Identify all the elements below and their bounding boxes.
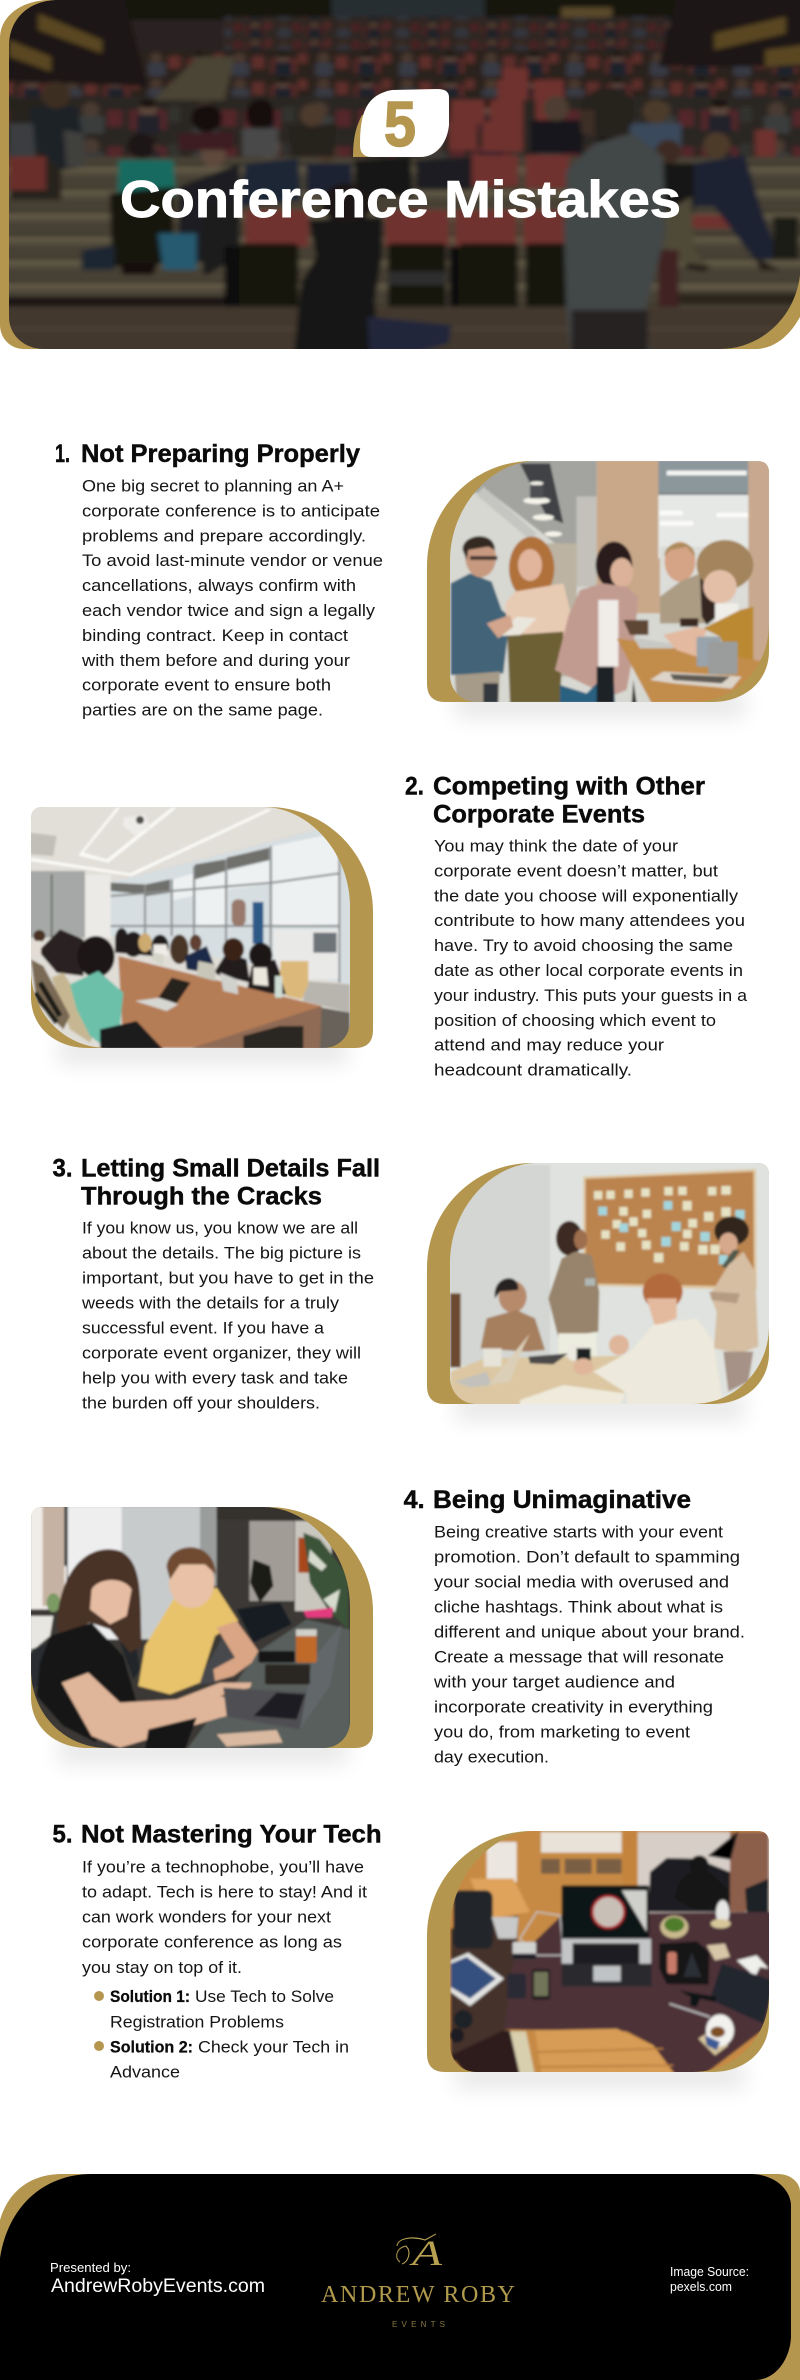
body text: mistake 1: cancellations, always confirm with — [82, 576, 356, 595]
title: Conference Mistakes — [120, 171, 681, 229]
body text: mistake 1: corporate conference is to anticipate — [82, 501, 380, 520]
body text: mistake 2: attend and may reduce your — [434, 1036, 664, 1055]
panel: mistake 3 text — [52, 1154, 380, 1412]
logo: Andrew Roby Events: A — [409, 2233, 443, 2273]
body text: mistake 1: To avoid last-minute vendor or venue — [82, 551, 383, 570]
heading: mistake 1: Not Preparing Properly — [81, 440, 360, 468]
solution 1 bullet: Use Tech to Solve — [195, 1987, 334, 2006]
image source credit: Image Source: — [670, 2264, 749, 2279]
body text: mistake 4: cliche hashtags. Think about what is — [434, 1598, 723, 1616]
presenter credit: Presented by: — [50, 2260, 131, 2275]
photo 4: two women at laptop — [31, 1507, 373, 1748]
solution 2 bullet: Solution 2: — [110, 2037, 193, 2056]
heading: mistake 3: Through the Cracks — [81, 1183, 322, 1211]
body text: mistake 1: with them before and during your — [81, 651, 350, 670]
panel: mistake 5 text — [52, 1820, 382, 2082]
body text: mistake 4: Create a message that will resonate — [434, 1648, 724, 1666]
shadow under photo 4 — [58, 1736, 348, 1764]
body text: mistake 4: Being creative starts with your event — [434, 1522, 723, 1542]
body text: mistake 1: parties are on the same page. — [82, 701, 323, 720]
body text: mistake 2: corporate event doesn’t matter, but — [434, 861, 718, 880]
body text: mistake 2: You may think the date of your — [434, 836, 678, 856]
body text: mistake 3: successful event. If you have a — [82, 1318, 325, 1338]
hero gold backing — [0, 0, 800, 349]
body text: mistake 4: you do, from marketing to event — [434, 1722, 690, 1742]
solution 2 bullet: Check your Tech in — [198, 2037, 349, 2056]
body text: mistake 2: headcount dramatically. — [434, 1061, 632, 1080]
body text: mistake 5: you stay on top of it. — [82, 1958, 242, 1977]
image source credit: pexels.com — [670, 2279, 732, 2294]
body text: mistake 4: incorporate creativity in everything — [434, 1698, 713, 1716]
body text: mistake 2: date as other local corporate events in — [434, 961, 743, 980]
body text: mistake 1 — [81, 476, 383, 720]
body text: mistake 3: the burden off your shoulders. — [82, 1394, 320, 1412]
body text: mistake 5: If you’re a technophobe, you’ll have — [82, 1858, 364, 1876]
heading: mistake 5: 5. — [52, 1820, 72, 1848]
body text: mistake 1: binding contract. Keep in contact — [82, 626, 348, 645]
heading: mistake 2: 2. — [405, 773, 424, 801]
body text: mistake 5 — [82, 1858, 367, 1977]
body text: mistake 5: to adapt. Tech is here to stay! And it — [82, 1883, 367, 1902]
body text: mistake 4: different and unique about your brand. — [434, 1622, 745, 1642]
shadow under photo 2 — [58, 1036, 348, 1064]
logo: Andrew Roby Events: ANDREW ROBY — [321, 2282, 515, 2308]
shadow under photo 3 — [455, 1393, 745, 1421]
heading: mistake 5: Not Mastering Your Tech — [81, 1820, 382, 1848]
badge: number 5 — [353, 88, 449, 160]
body text: mistake 5: corporate conference as long as — [82, 1932, 342, 1952]
heading: mistake 4: 4. — [404, 1486, 425, 1514]
photo 3: team at corkboard — [427, 1163, 769, 1404]
panel: mistake 4 text — [404, 1486, 745, 1766]
aisle stairs — [153, 57, 235, 100]
body text: mistake 4: day execution. — [434, 1748, 549, 1766]
solution 1 bullet — [94, 1987, 334, 2032]
solution 2 bullet — [94, 2037, 349, 2082]
body text: mistake 2: your industry. This puts your guests in a — [434, 986, 748, 1005]
body text: mistake 2: position of choosing which event to — [434, 1011, 716, 1030]
body text: mistake 2 — [434, 836, 748, 1080]
body text: mistake 4: promotion. Don’t default to spamming — [434, 1548, 740, 1566]
shadow under photo 1 — [455, 690, 745, 718]
body text: mistake 3 — [81, 1218, 374, 1412]
heading: mistake 3 — [52, 1154, 380, 1211]
photo 1: team around table — [427, 461, 769, 702]
photo 5: desk with laptop — [427, 1831, 769, 2072]
shadow under photo 5 — [455, 2061, 745, 2089]
body text: mistake 3: important, but you have to get in the — [82, 1268, 374, 1288]
body text: mistake 3: help you with every task and take — [82, 1368, 348, 1388]
footer gold backing — [0, 2174, 800, 2380]
mid row people — [9, 82, 798, 277]
hero photo: conference audience — [0, 0, 800, 360]
speaker — [564, 133, 666, 360]
heading: mistake 1: 1. — [55, 440, 70, 468]
heading: mistake 2 — [405, 773, 705, 829]
footer panel — [0, 2174, 800, 2380]
image source credit — [670, 2264, 749, 2294]
panel: mistake 1 text — [55, 440, 383, 720]
body text: mistake 3: about the details. The big picture is — [82, 1244, 361, 1262]
heading: mistake 3: Letting Small Details Fall — [81, 1154, 380, 1182]
footer black panel — [0, 2174, 791, 2380]
body text: mistake 1: problems and prepare accordingly. — [82, 526, 366, 545]
heading: mistake 4: Being Unimaginative — [433, 1486, 691, 1514]
body text: mistake 2: the date you choose will exponentially — [434, 886, 739, 905]
body text: mistake 1: corporate event to ensure both — [82, 676, 331, 695]
seated front person — [293, 217, 383, 360]
body text: mistake 1: One big secret to planning an A+ — [82, 476, 344, 496]
body text: mistake 3: If you know us, you know we are all — [82, 1218, 358, 1238]
body text: mistake 4: your social media with overused and — [434, 1572, 729, 1592]
heading: mistake 2: Competing with Other — [433, 773, 705, 801]
body text: mistake 5: can work wonders for your next — [82, 1908, 331, 1927]
body text: mistake 1: each vendor twice and sign a legally — [82, 601, 376, 620]
hero banner — [0, 0, 800, 360]
body text: mistake 2: contribute to how many attendees you — [434, 911, 745, 930]
solution 2 bullet: Advance — [110, 2063, 180, 2082]
body text: mistake 2: have. Try to avoid choosing the same — [434, 936, 733, 955]
logo: Andrew Roby Events — [321, 2233, 515, 2329]
solution 1 bullet: Registration Problems — [110, 2012, 284, 2032]
photo 2: boardroom meeting — [31, 807, 373, 1048]
presenter credit — [50, 2260, 265, 2297]
presenter credit: AndrewRobyEvents.com — [51, 2276, 265, 2297]
heading: mistake 3: 3. — [52, 1154, 72, 1182]
panel: mistake 2 text — [405, 773, 748, 1080]
front row seats — [240, 243, 569, 310]
body text: mistake 4: with your target audience and — [433, 1672, 675, 1692]
body text: mistake 4 — [433, 1522, 745, 1766]
body text: mistake 3: corporate event organizer, they will — [82, 1344, 361, 1362]
solution 1 bullet: Solution 1: — [110, 1987, 190, 2006]
logo: Andrew Roby Events: EVENTS — [392, 2320, 445, 2329]
heading: mistake 2: Corporate Events — [433, 801, 645, 829]
badge: number 5: 5 — [384, 88, 416, 160]
body text: mistake 3: weeds with the details for a truly — [81, 1294, 340, 1312]
